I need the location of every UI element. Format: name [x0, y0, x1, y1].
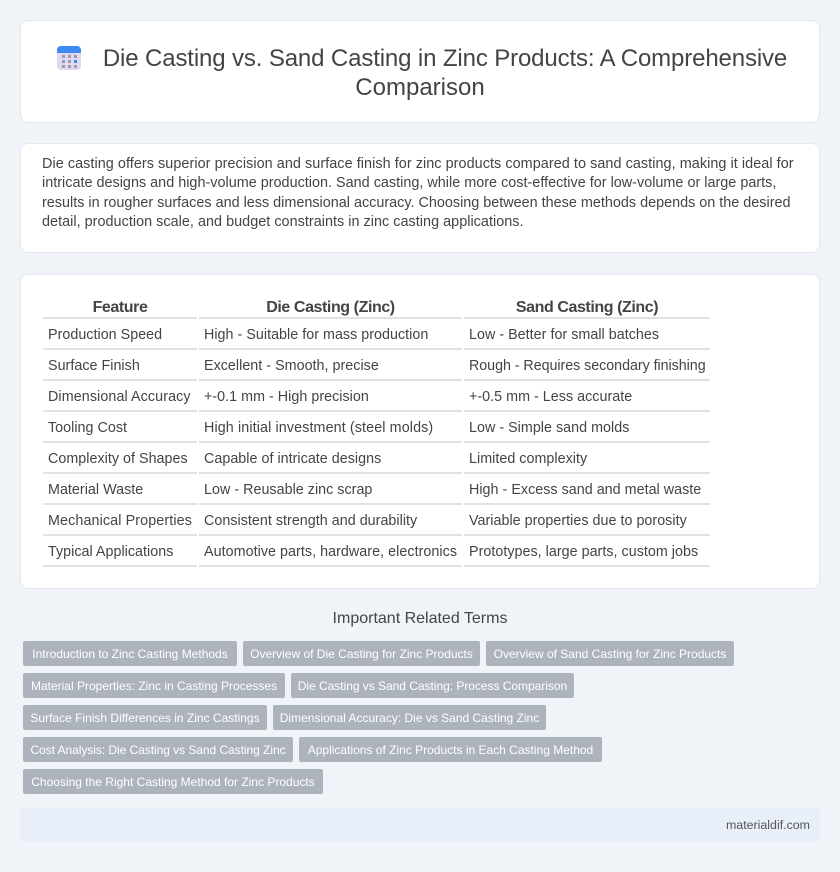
- tag: Die Casting vs Sand Casting: Process Comparison: [298, 679, 567, 693]
- row: mechanical properties: [48, 513, 687, 529]
- tag: Applications of Zinc Products in Each Casting Method: [308, 743, 593, 757]
- text block: summary: results in rougher surfaces and less dimensional accuracy. Choosing between these methods depends on the desired: [42, 195, 790, 211]
- tag: Overview of Sand Casting for Zinc Products: [494, 647, 726, 661]
- heading: important related terms: Important Related Terms: [333, 610, 507, 627]
- title: Die Casting vs. Sand Casting in Zinc Products: A Comprehensive: [103, 45, 787, 72]
- tag: Cost Analysis: Die Casting vs Sand Casting Zinc: [30, 743, 286, 757]
- tag: [273, 705, 546, 730]
- tag: [23, 769, 323, 794]
- row: production speed: [48, 327, 659, 343]
- row: dimensional accuracy: [48, 389, 632, 405]
- related terms tags: [23, 641, 734, 794]
- title: Comparison: [355, 74, 485, 101]
- row: material waste: High - Excess sand and metal waste: [469, 482, 701, 498]
- tag: [23, 737, 293, 762]
- tag: Introduction to Zinc Casting Methods: [32, 647, 228, 661]
- tag: [23, 673, 285, 698]
- text block: summary: [42, 156, 794, 230]
- row: dimensional accuracy: Dimensional Accuracy: [48, 389, 191, 405]
- row: complexity of shapes: Capable of intricate designs: [204, 451, 381, 467]
- tag: Surface Finish Differences in Zinc Castings: [30, 711, 260, 725]
- tag: [291, 673, 574, 698]
- row: production speed: High - Suitable for mass production: [204, 327, 428, 343]
- text block: summary: detail, production scale, and budget constraints in zinc casting applications.: [42, 214, 524, 230]
- row: mechanical properties: Mechanical Properties: [48, 513, 192, 529]
- title: [103, 45, 787, 101]
- tag: Overview of Die Casting for Zinc Products: [250, 647, 473, 661]
- row: material waste: Low - Reusable zinc scrap: [204, 482, 372, 498]
- row: tooling cost: Tooling Cost: [48, 420, 127, 436]
- row: typical applications: [48, 544, 698, 560]
- row: mechanical properties: Consistent strength and durability: [204, 513, 417, 529]
- footer source text: materialdif.com: [726, 818, 810, 832]
- text block: summary: intricate designs and high-volume production. Sand casting, while more cost-effective for low-volume or large parts,: [42, 175, 776, 191]
- row: typical applications: Prototypes, large parts, custom jobs: [469, 544, 698, 560]
- table header row: Die Casting (Zinc): [266, 299, 395, 316]
- row: tooling cost: High initial investment (steel molds): [204, 420, 433, 436]
- row: surface finish: Surface Finish: [48, 358, 140, 374]
- row: surface finish: Rough - Requires secondary finishing: [469, 358, 706, 374]
- row: typical applications: Automotive parts, hardware, electronics: [204, 544, 457, 560]
- row: typical applications: Typical Applications: [48, 544, 173, 560]
- table header row: Feature: [93, 299, 147, 316]
- tag: [23, 705, 267, 730]
- text block: summary: Die casting offers superior precision and surface finish for zinc products compared to sand casting, making it ideal for: [42, 156, 794, 172]
- row: tooling cost: Low - Simple sand molds: [469, 420, 629, 436]
- tag: [243, 641, 480, 666]
- comparison table: [43, 299, 710, 567]
- row: complexity of shapes: Limited complexity: [469, 451, 587, 467]
- row: complexity of shapes: Complexity of Shapes: [48, 451, 188, 467]
- tag: [299, 737, 602, 762]
- panel: header: [20, 20, 820, 123]
- row: tooling cost: [48, 420, 629, 436]
- footer: [20, 808, 820, 842]
- row: production speed: Production Speed: [48, 327, 162, 343]
- panel: comparison table card: [20, 274, 820, 589]
- table header row: Sand Casting (Zinc): [516, 299, 658, 316]
- row: material waste: Material Waste: [48, 482, 143, 498]
- row: material waste: [48, 482, 701, 498]
- row: complexity of shapes: [48, 451, 588, 467]
- tag: Dimensional Accuracy: Die vs Sand Casting Zinc: [280, 711, 539, 725]
- table header row: [93, 299, 658, 316]
- tag: Material Properties: Zinc in Casting Processes: [31, 679, 277, 693]
- row: production speed: Low - Better for small batches: [469, 327, 659, 343]
- row: mechanical properties: Variable properties due to porosity: [469, 513, 687, 529]
- row: dimensional accuracy: +-0.1 mm - High precision: [204, 389, 369, 405]
- tag: [23, 641, 237, 666]
- icon: calendar grid: [57, 46, 81, 70]
- tag: Choosing the Right Casting Method for Zinc Products: [31, 775, 315, 789]
- panel: summary text: [20, 143, 820, 253]
- row: dimensional accuracy: +-0.5 mm - Less accurate: [469, 389, 632, 405]
- tag: [486, 641, 734, 666]
- row: surface finish: [48, 358, 706, 374]
- row: surface finish: Excellent - Smooth, precise: [204, 358, 379, 374]
